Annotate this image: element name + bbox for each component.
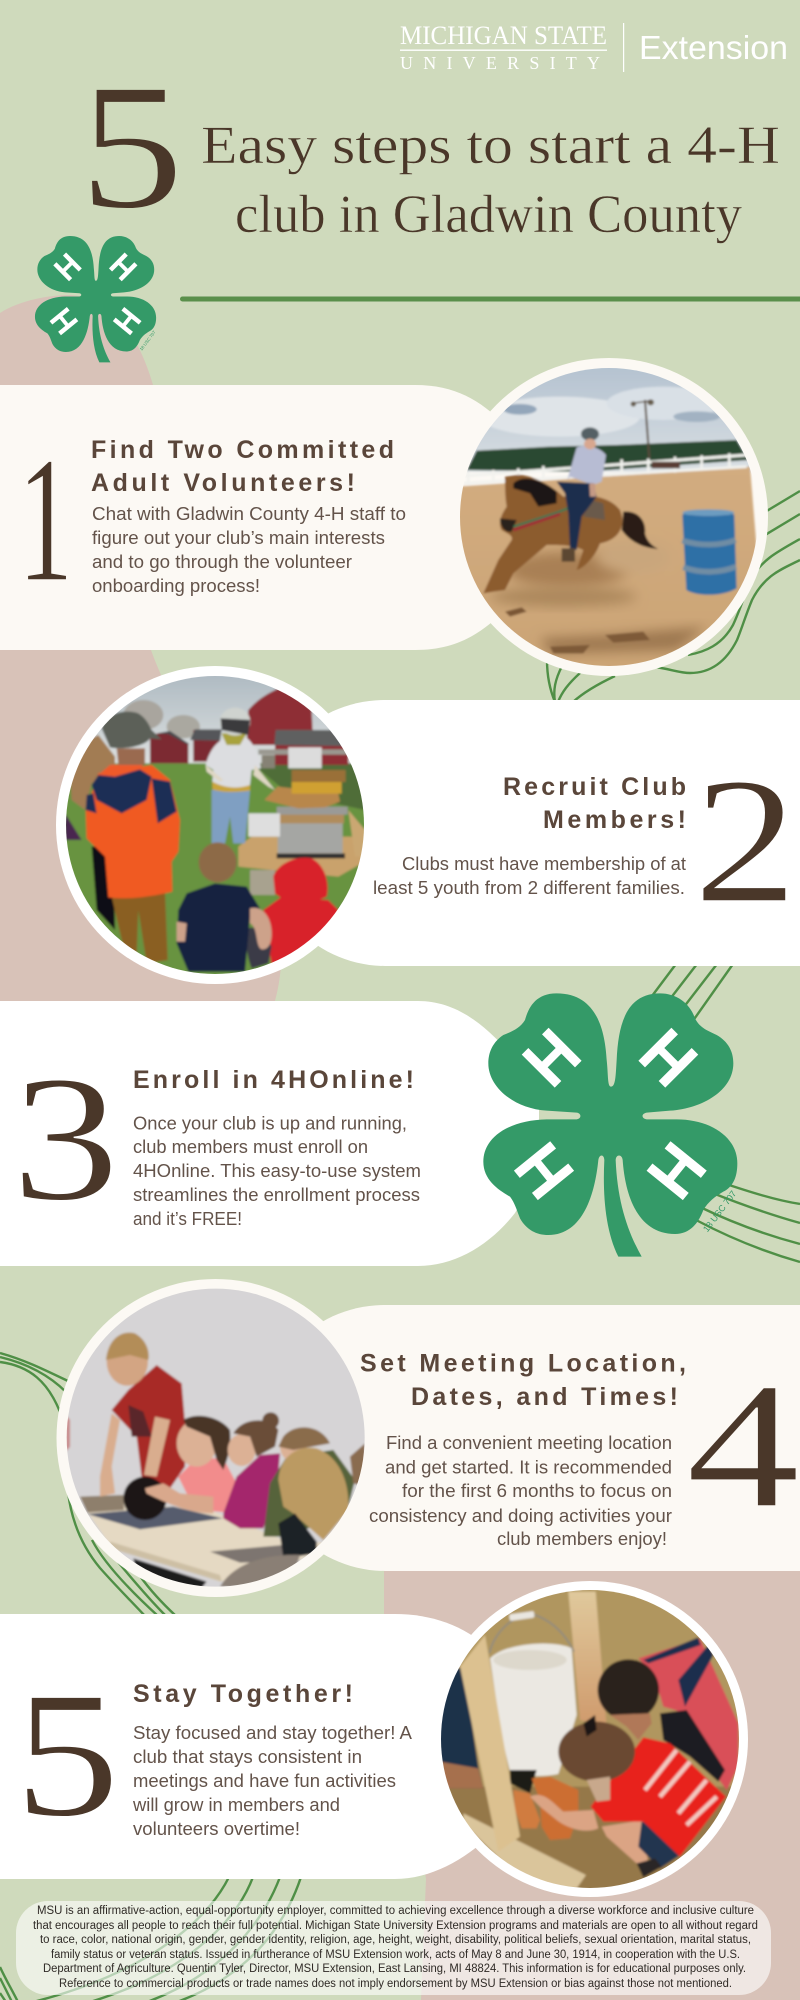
body: step 2: Clubs must have membership of at [402, 854, 686, 874]
heading: step 4: Set Meeting Location, [360, 1350, 686, 1378]
heading: step 2: Recruit Club [503, 773, 686, 801]
heading: step 4: Dates, and Times! [411, 1383, 678, 1411]
body: step 5: club that stays consistent in [133, 1747, 362, 1767]
body: step 5: volunteers overtime! [133, 1819, 300, 1839]
body: step 1 [92, 504, 406, 596]
heading: step 1: Find Two Committed [91, 436, 394, 464]
footer: disclaimer: MSU is an affirmative-action, equal-opportunity employer, committed to achieving excellence through a diverse workforce and inclusive culture [37, 1905, 754, 1917]
panel: step 3 [0, 1001, 539, 1266]
logo: Michigan State University Extension [400, 21, 788, 73]
heading: step 2 [503, 773, 686, 834]
heading: step 1 [91, 436, 394, 497]
body: step 3 [133, 1114, 421, 1229]
body: step 5: Stay focused and stay together! A [133, 1723, 412, 1743]
logo: Michigan State University Extension: MICHIGAN STATE [400, 21, 607, 50]
body: step 4: club members enjoy! [497, 1529, 667, 1549]
photo: beekeeper with children [56, 666, 374, 984]
logo: Michigan State University Extension: UNIVERSITY [400, 53, 600, 73]
body: step 5 [132, 1723, 412, 1839]
numeral 4: 4 [686, 1346, 800, 1545]
pink blob: upper left [0, 295, 282, 1001]
footer: disclaimer: family status or veteran status. Issued in furtherance of MSU Extension work, acts of May 8 and June 30, 1914, in cooperation with the U.S. [51, 1949, 740, 1961]
body: step 3: club members must enroll on [133, 1137, 368, 1157]
body: step 4: and get started. It is recommended [385, 1458, 672, 1478]
photo: barrel racing horse and rider [450, 358, 768, 676]
title: club in Gladwin County [235, 184, 742, 244]
body: step 1: onboarding process! [92, 576, 260, 596]
body: step 1: figure out your club’s main interests [92, 528, 385, 548]
green divider line [180, 296, 800, 302]
body: step 3: Once your club is up and running, [133, 1114, 407, 1134]
body: step 3: 4HOnline. This easy-to-use system [133, 1161, 421, 1181]
body: step 5: will grow in members and [132, 1795, 340, 1815]
numeral 1: 1 [18, 420, 73, 619]
body: step 4: for the first 6 months to focus on [402, 1481, 672, 1501]
logo: Michigan State University Extension: Extension [639, 29, 788, 66]
numeral 2: 2 [694, 741, 798, 940]
panel: step 4 [295, 1305, 800, 1571]
body: step 3: streamlines the enrollment process [133, 1185, 420, 1205]
title: Easy steps to start a 4-H [201, 115, 780, 175]
footer: disclaimer: Reference to commercial products or trade names does not imply endorsement by MSU Extension or bias against those not mentioned. [59, 1978, 732, 1990]
body: step 4: Find a convenient meeting location [386, 1433, 672, 1453]
icon: small 4-H clover: 18 USC 707 [139, 329, 157, 351]
heading: step 3: Enroll in 4HOnline! [133, 1066, 414, 1094]
icon: large 4-H clover: 18 USC 707 [701, 1189, 738, 1234]
title [201, 115, 780, 244]
pink blob: lower right [384, 1560, 800, 2000]
numeral 5: 5 [14, 1655, 120, 1854]
body: step 4 [369, 1433, 672, 1549]
body: step 3: and it’s FREE! [133, 1209, 242, 1229]
numeral 3: 3 [12, 1039, 120, 1238]
panel: step 5 [0, 1614, 490, 1879]
heading: step 4 [360, 1350, 686, 1411]
icon: small 4-H clover [35, 236, 157, 362]
footer: disclaimer: that encourages all people to reach their full potential. Michigan State University Extension programs and materials are open to all without regard [33, 1920, 758, 1932]
photo: children with bucket feeder [432, 1581, 748, 1897]
body: step 1: and to go through the volunteer [92, 552, 352, 572]
panel: step 2 [295, 700, 800, 966]
body: step 5: meetings and have fun activities [133, 1771, 396, 1791]
icon: large 4-H clover [483, 993, 738, 1257]
title numeral 5: 5 [79, 47, 184, 246]
heading: step 1: Adult Volunteers! [91, 469, 355, 497]
panel: step 1 [0, 385, 505, 650]
body: step 1: Chat with Gladwin County 4-H staff to [92, 504, 406, 524]
footer: disclaimer [16, 1901, 771, 1995]
footer: disclaimer: to race, color, national origin, gender, gender identity, religion, age, height, weight, disability, political beliefs, sexual orientation, marital status, [40, 1934, 751, 1946]
decorative green lines [0, 491, 800, 2000]
body: step 4: consistency and doing activities your [369, 1506, 672, 1526]
footer: disclaimer: Department of Agriculture. Quentin Tyler, Director, MSU Extension, East Lansing, MI 48824. This information is for educational purposes only. [43, 1963, 746, 1975]
body: step 2 [373, 854, 686, 898]
body: step 2: least 5 youth from 2 different families. [373, 878, 685, 898]
heading: step 5: Stay Together! [133, 1680, 353, 1708]
heading: step 2: Members! [543, 806, 686, 834]
photo: children with guinea pig at table [56, 1279, 374, 1597]
